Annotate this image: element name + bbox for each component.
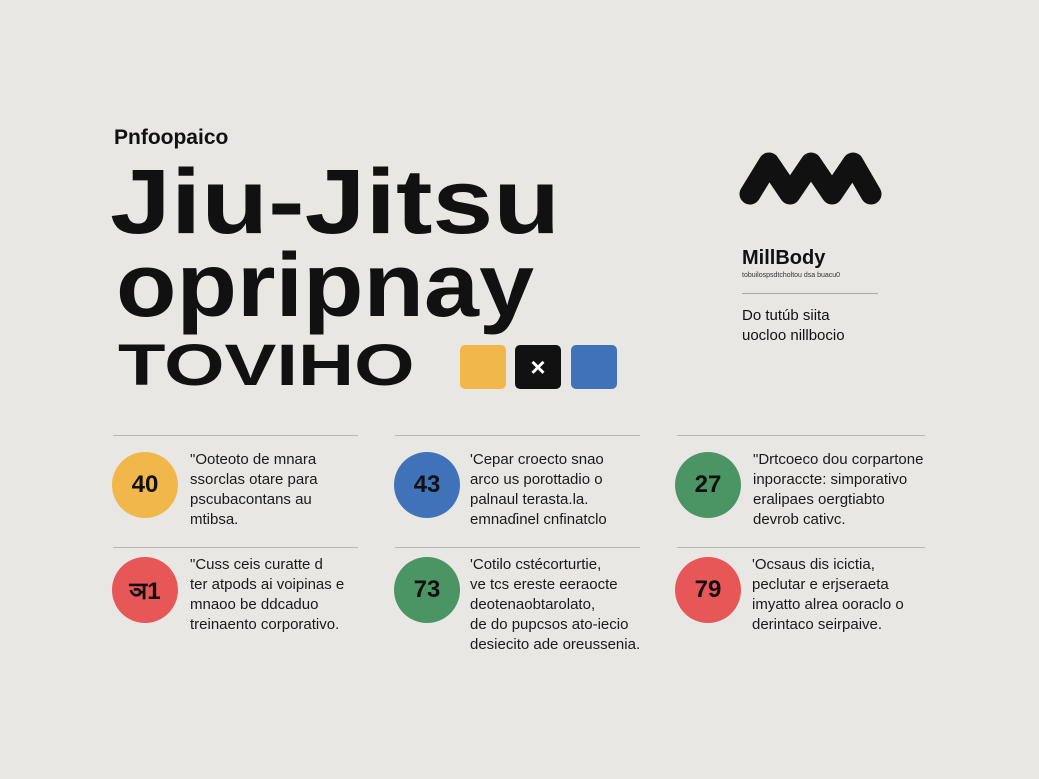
brand: MillBody <box>742 247 825 269</box>
stat 79: derintaco seirpaive. <box>752 616 882 633</box>
stat 81: mnaoo be ddcaduo <box>190 596 318 613</box>
stat 40: pscubacontans au <box>190 491 312 508</box>
icon: logo <box>740 152 882 204</box>
squares <box>460 345 617 389</box>
brand <box>742 247 878 344</box>
stat 40: ssoɾclas otare para <box>190 471 318 488</box>
stat 40: mtibsa. <box>190 511 238 528</box>
stat 27: inporaccte: simporativo <box>753 471 907 488</box>
stat 27: "Drtcoeco dou corpartone <box>753 451 923 468</box>
title line 2: opripnay <box>116 236 534 336</box>
stat 81: ter atpods ai voipinas e <box>190 576 344 593</box>
stat 73: deotenaobtarolato, <box>470 596 595 613</box>
brand: uocloo nillbocio <box>742 327 845 344</box>
stat 40: 40 <box>132 471 158 498</box>
stat 79 <box>675 556 904 633</box>
stat 73: ve tcs ereste eeraocte <box>470 576 618 593</box>
stat 40 <box>112 451 318 528</box>
stat 81 <box>112 556 344 633</box>
stat 73: 'Cotilo cstécorturtie, <box>470 556 601 573</box>
stat 73 <box>394 556 640 653</box>
stat 73: desiecito ade oreussenia. <box>470 636 640 653</box>
text: × <box>530 352 546 382</box>
stat 79: peclutar e erjseraeta <box>752 576 889 593</box>
stat 27: devrob cativc. <box>753 511 846 528</box>
stat 79: 'Ocsaus dis icictia, <box>752 556 875 573</box>
eyebrow: Pnfoopaico <box>114 126 228 149</box>
stat 27 <box>675 451 923 528</box>
stat 27: 27 <box>695 471 721 498</box>
title line 1: Jiu-Jitsu <box>110 151 560 253</box>
brand: tobuilospsdtcholtou dsa buacu0 <box>742 272 840 279</box>
stat 43 <box>394 451 607 528</box>
stat 43: 'Cepar croecto snao <box>470 451 604 468</box>
stat 73: 73 <box>414 576 440 603</box>
stat 81: ञ1 <box>129 578 161 604</box>
stat 43: 43 <box>414 471 440 498</box>
stat 79: 79 <box>695 576 721 603</box>
stat 43: emnaɗinel cnfinatclo <box>470 511 607 528</box>
brand: Do tutúb siita <box>742 307 830 324</box>
subtitle: TOVIHO <box>118 333 415 398</box>
stat 81: treinaento corporativo. <box>190 616 339 633</box>
stat 43: palnaul terasta.la. <box>470 491 588 508</box>
stat 73: de do pupcsos ato-iecio <box>470 616 628 633</box>
stat 27: eralipaes oergtiabto <box>753 491 885 508</box>
stat 81: "Cuss ceis curatte d <box>190 556 323 573</box>
stat 43: arco us porottadio o <box>470 471 603 488</box>
stat 79: imyatto alrea ooraclo o <box>752 596 904 613</box>
stat 40: "Ooteoto de mnara <box>190 451 316 468</box>
